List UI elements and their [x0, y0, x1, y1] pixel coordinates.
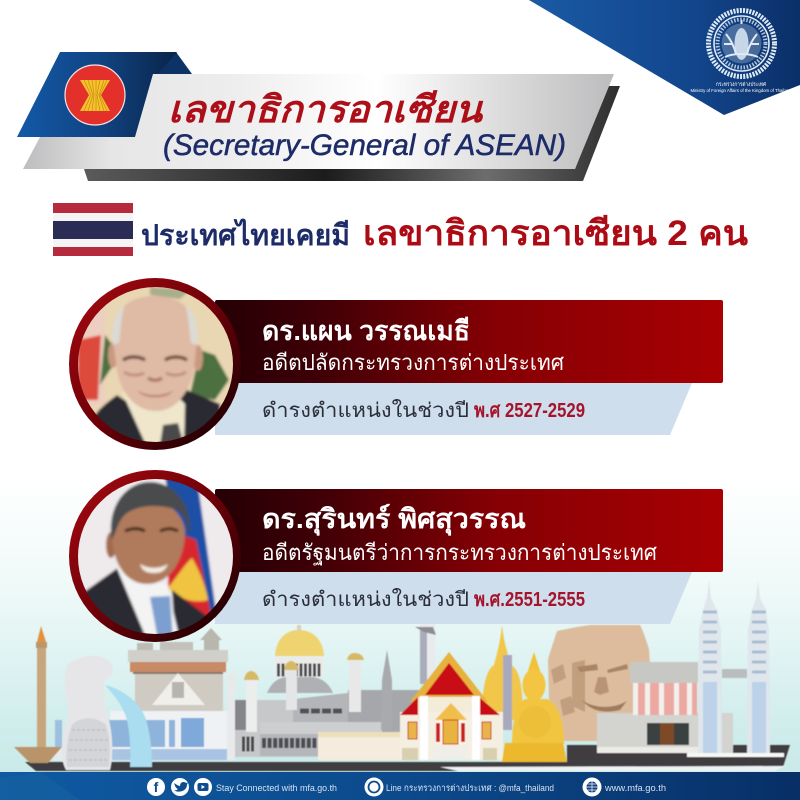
- Merlion statue with water: [62, 656, 152, 770]
- icon: twitter: [171, 778, 189, 796]
- title banner: [17, 52, 620, 181]
- name: ดร.สุรินทร์ พิศสุวรรณ: [262, 503, 526, 536]
- icon: facebook: [147, 778, 165, 796]
- icon: Thai flag: [53, 203, 133, 256]
- term label: ดำรงตำแหน่งในช่วงปี: [262, 399, 469, 422]
- name bar: [215, 300, 723, 383]
- cream building: [318, 732, 403, 760]
- portrait photo: [78, 479, 233, 634]
- line text: Line กระทรวงการต่างประเทศ : @mfa_thailand: [386, 783, 554, 794]
- role: อดีตรัฐมนตรีว่าการกระทรวงการต่างประเทศ: [262, 540, 657, 566]
- term years: พ.ศ.2551-2555: [474, 589, 585, 611]
- Patuxai monument: [128, 628, 228, 734]
- mosque: [235, 625, 420, 757]
- Petronas towers: [687, 580, 784, 757]
- website text: www.mfa.go.th: [604, 783, 666, 794]
- golden stupa: [482, 625, 523, 730]
- title Thai: เลขาธิการอาเซียน: [168, 89, 484, 130]
- portrait frame: [69, 278, 241, 450]
- heading with Thai flag: [53, 203, 748, 256]
- heading part 2: เลขาธิการอาเซียน 2 คน: [363, 214, 748, 253]
- icon: youtube: [194, 778, 212, 796]
- corner ribbon with ministry seal: [529, 0, 800, 115]
- golden Buddha: [502, 652, 567, 762]
- term years: พ.ศ 2527-2529: [474, 400, 585, 422]
- skyline illustration: [14, 580, 790, 771]
- Thai temple: [400, 652, 503, 760]
- Monas monument: [14, 626, 62, 763]
- panel: Dr. Surin Pitsuwan: [69, 470, 723, 642]
- icon: ministry seal: [708, 10, 774, 76]
- name bar: [215, 489, 723, 572]
- ministry name: Ministry of Foreign Affairs of the Kingdom of Thailand: [690, 88, 792, 93]
- Bayon stone face: [548, 625, 651, 741]
- icon: facebook: f: [154, 779, 159, 795]
- heading part 1: ประเทศไทยเคยมี: [141, 218, 350, 252]
- role: อดีตปลัดกระทรวงการต่างประเทศ: [262, 350, 564, 375]
- term label: ดำรงตำแหน่งในช่วงปี: [262, 588, 469, 611]
- social text: Stay Connected with mfa.go.th: [216, 783, 337, 794]
- panel: Dr. Phan Wannamethee: [69, 278, 723, 450]
- portrait frame: [69, 470, 241, 642]
- years bar: [215, 383, 692, 435]
- mausoleum: [597, 662, 733, 753]
- icon: ASEAN emblem: [65, 65, 125, 125]
- footer bar: [0, 772, 800, 800]
- icon: line: [364, 778, 384, 796]
- ground: [25, 745, 790, 771]
- name: ดร.แผน วรรณเมธี: [262, 316, 470, 346]
- light strip: [440, 766, 785, 771]
- title English: (Secretary-General of ASEAN): [163, 129, 566, 162]
- icon: globe: [582, 778, 602, 796]
- blue buildings: [52, 673, 235, 760]
- years bar: [215, 572, 692, 624]
- ministry name: กระทรวงการต่างประเทศ: [716, 81, 766, 88]
- tall tower: [415, 624, 436, 684]
- ministry name: [690, 81, 792, 93]
- portrait photo: [75, 285, 237, 445]
